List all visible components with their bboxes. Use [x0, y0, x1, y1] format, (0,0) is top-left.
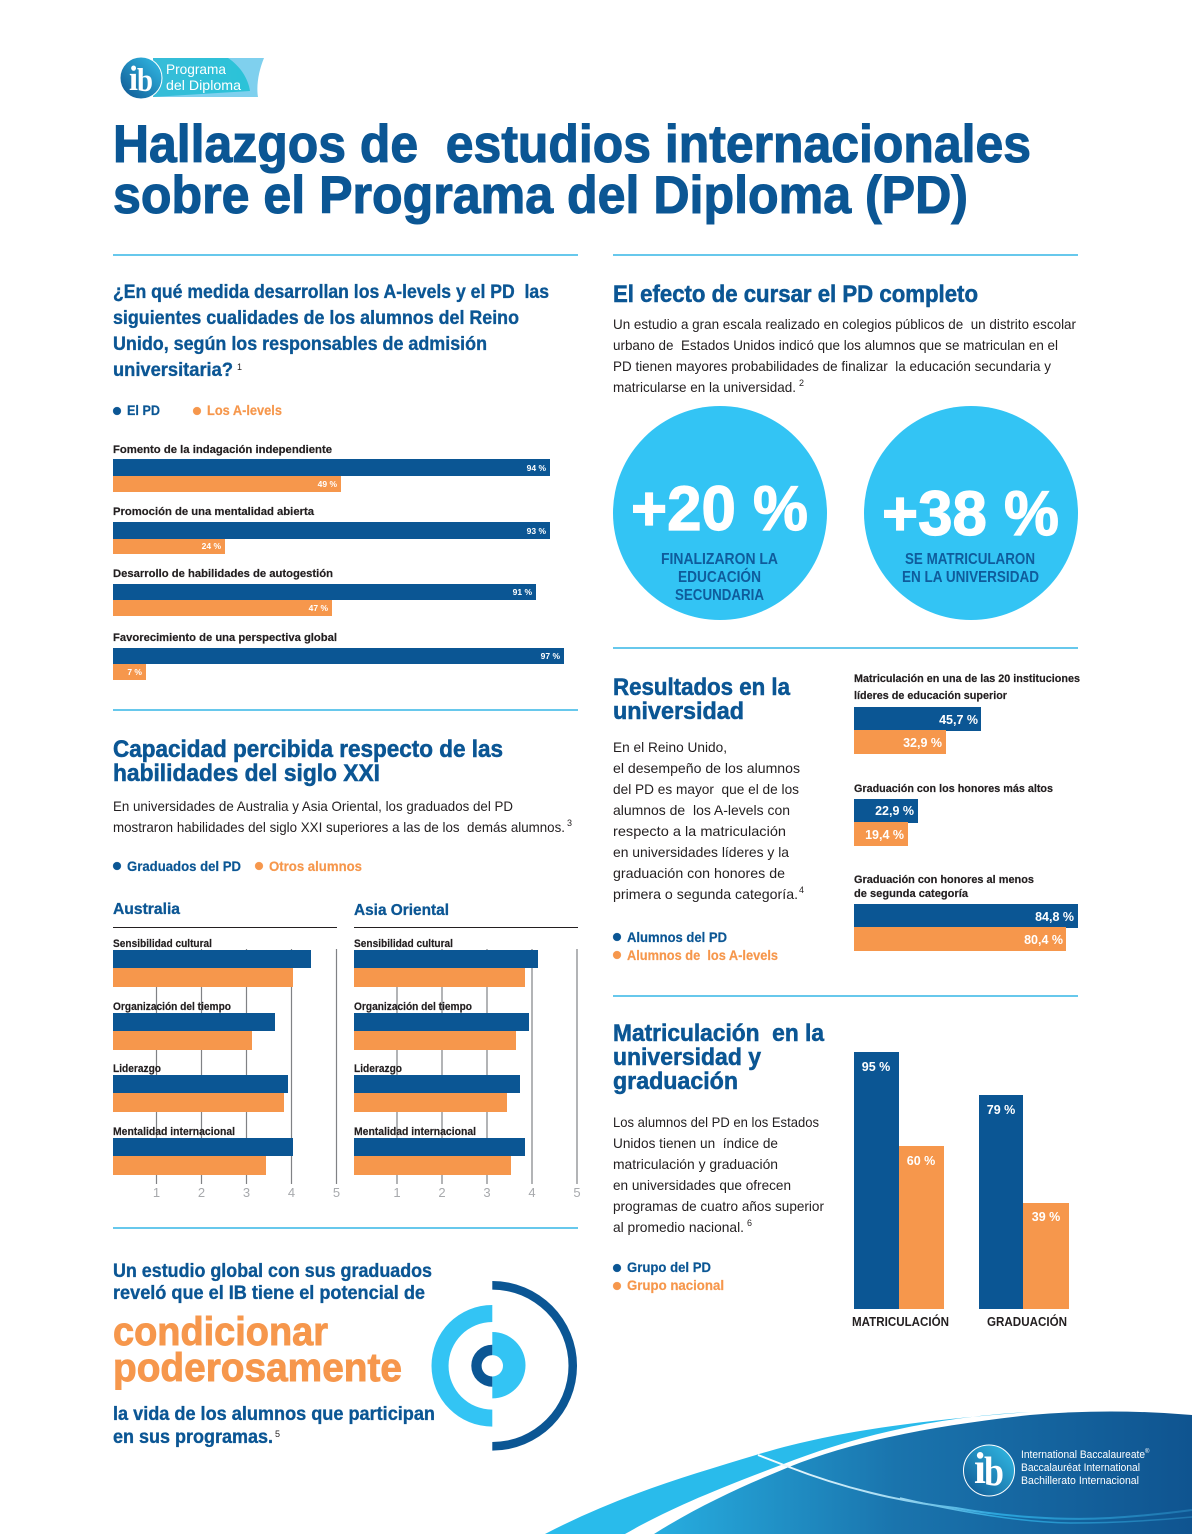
bar chart: highest honours	[854, 783, 1053, 846]
bar chart: Australia: Mentalidad internacional	[113, 1126, 235, 1138]
legend: PD and A-levels: El PD	[127, 402, 160, 418]
bar chart: Asia Oriental	[354, 902, 581, 1200]
text block: US enrolment: Unidos tienen un índice de	[613, 1135, 778, 1151]
icon: concentric half rings	[431, 1281, 577, 1451]
text block: US enrolment: 6	[747, 1218, 752, 1228]
stat circle: +20 %	[613, 406, 827, 620]
bar chart: highest honours: Graduación con los honores más altos	[854, 783, 1053, 795]
column chart: enrolment and graduation: 95 %	[862, 1060, 890, 1074]
text block: global study outro: en sus programas.	[113, 1427, 273, 1448]
text block: skills study: 3	[567, 818, 572, 828]
column chart: enrolment and graduation: MATRICULACIÓN	[852, 1314, 949, 1329]
text block: skills study: En universidades de Australia y Asia Oriental, los graduados del PD	[113, 798, 513, 814]
text block: global study intro: reveló que el IB tiene el potencial de	[113, 1283, 425, 1304]
text block: UK results: En el Reino Unido,	[613, 739, 727, 755]
bar chart: top institutions: 45,7 %	[939, 713, 978, 727]
bar chart: Australia: 1	[153, 1185, 160, 1200]
text block: UK results: graduación con honores de	[613, 865, 785, 881]
bar chart: four qualities: 94 %	[527, 463, 546, 473]
stat circle: +20 %: +20 %	[631, 474, 808, 544]
heading: enrolment: graduación	[613, 1068, 738, 1095]
bar chart: top institutions: líderes de educación superior	[854, 690, 1008, 702]
bar chart: Asia Oriental: Liderazgo	[354, 1063, 402, 1075]
footer wave	[545, 1412, 1192, 1534]
bar chart: four qualities: Fomento de la indagación independiente	[113, 444, 332, 456]
heading: enrolment: Matriculación en la	[613, 1020, 825, 1047]
heading: results: Resultados en la	[613, 674, 791, 701]
text block: global study intro	[113, 1261, 432, 1304]
bar chart: four qualities: 24 %	[202, 541, 221, 551]
bar chart: second category honours: Graduación con honores al menos	[854, 874, 1034, 886]
logo: International Baccalaureate: Bachillerato Internacional	[1021, 1475, 1139, 1487]
panel: A-levels vs PD qualities	[113, 282, 564, 680]
text block: UK results: primera o segunda categoría.	[613, 886, 798, 902]
callout: condicionar poderosamente: poderosamente	[113, 1346, 402, 1390]
stat circle: +20 %: EDUCACIÓN	[678, 568, 761, 586]
legend: graduates: Otros alumnos	[269, 858, 362, 874]
text block: UK results: respecto a la matriculación	[613, 823, 786, 839]
text block: US enrolment: al promedio nacional.	[613, 1219, 744, 1235]
bar chart: top institutions: Matriculación en una de las 20 instituciones	[854, 673, 1080, 685]
logo: International Baccalaureate: International Baccalaureate	[1021, 1449, 1145, 1461]
text block: UK results	[613, 739, 804, 902]
bar chart: Asia Oriental: 5	[573, 1185, 581, 1200]
stat circle: +38 %: +38 %	[882, 479, 1059, 549]
bar chart: Australia	[113, 901, 340, 1200]
panel: full PD effect	[613, 281, 1078, 620]
bar chart: Australia: 2	[198, 1185, 205, 1200]
stat circle: +38 %: EN LA UNIVERSIDAD	[902, 569, 1039, 586]
text block: UK results: 4	[799, 885, 804, 895]
bar chart: top institutions: 32,9 %	[903, 736, 942, 750]
bar chart: four qualities: 7 %	[127, 667, 142, 677]
bar chart: second category honours	[854, 874, 1078, 951]
callout: condicionar poderosamente	[113, 1310, 402, 1390]
bar chart: Australia: 4	[288, 1185, 295, 1200]
legend: graduates: Graduados del PD	[127, 858, 241, 874]
legend: PD and national group	[613, 1259, 724, 1293]
legend: PD and A-levels	[113, 402, 282, 418]
bar chart: Asia Oriental: Asia Oriental	[354, 902, 449, 919]
legend: PD and A-levels students: Alumnos de los A-levels	[627, 947, 778, 963]
stat circle: +20 %: FINALIZARON LA	[661, 551, 778, 568]
text block: global study outro	[113, 1404, 435, 1448]
panel: 21st century skills	[113, 736, 581, 1200]
legend: PD and national group: Grupo nacional	[627, 1277, 724, 1293]
stat circle: +20 %: SECUNDARIA	[675, 587, 764, 604]
heading: admissions question: universitaria?	[113, 360, 233, 381]
text block: US enrolment: programas de cuatro años superior	[613, 1198, 824, 1214]
column chart: enrolment and graduation: 60 %	[907, 1154, 935, 1168]
panel: global graduate study	[113, 1261, 577, 1451]
bar chart: four qualities: Promoción de una mentalidad abierta	[113, 506, 315, 518]
logo: International Baccalaureate	[964, 1444, 1150, 1496]
text block: US enrolment: Los alumnos del PD en los Estados	[613, 1114, 819, 1130]
panel: university results	[613, 673, 1080, 963]
heading: perceived capacity	[113, 736, 503, 787]
bar chart: four qualities: Desarrollo de habilidades de autogestión	[113, 568, 333, 580]
text block: skills study: mostraron habilidades del siglo XXI superiores a las de los demás alumnos.	[113, 819, 565, 835]
bar chart: second category honours: de segunda categoría	[854, 888, 969, 900]
stat circle: +38 %: SE MATRICULARON	[905, 551, 1035, 568]
bar chart: Australia: Liderazgo	[113, 1063, 161, 1075]
heading: admissions question: Unido, según los responsables de admisión	[113, 334, 487, 355]
column chart: enrolment and graduation	[852, 1052, 1069, 1329]
bar chart: second category honours: 80,4 %	[1024, 933, 1063, 947]
text block: US enrolment: en universidades que ofrecen	[613, 1177, 791, 1193]
bar chart: four qualities: 97 %	[541, 651, 560, 661]
bar chart: four qualities: 49 %	[318, 479, 337, 489]
heading: enrolment	[613, 1020, 825, 1095]
heading: admissions question: ¿En qué medida desarrollan los A-levels y el PD las	[113, 282, 549, 303]
bar chart: Australia: 3	[243, 1185, 250, 1200]
legend: PD and national group: Grupo del PD	[627, 1259, 711, 1275]
logo: Programa del Diploma: del Diploma	[166, 77, 241, 93]
text block: US enrolment	[613, 1114, 824, 1235]
bar chart: Australia: Sensibilidad cultural	[113, 938, 212, 950]
column chart: enrolment and graduation: 39 %	[1032, 1210, 1060, 1224]
logo: International Baccalaureate: b	[984, 1448, 1004, 1494]
bar chart: highest honours: 22,9 %	[875, 804, 914, 818]
text block: global study intro: Un estudio global con sus graduados	[113, 1261, 432, 1282]
title	[113, 115, 1031, 225]
logo: Programa del Diploma: Programa	[166, 61, 226, 77]
legend: PD and A-levels students	[613, 929, 778, 963]
logo: Programa del Diploma	[120, 57, 264, 99]
text block: UK results: alumnos de los A-levels con	[613, 802, 790, 818]
text block: UK results: del PD es mayor que el de los	[613, 781, 799, 797]
bar chart: four qualities: 93 %	[527, 526, 546, 536]
bar chart: Asia Oriental: 1	[393, 1185, 401, 1200]
heading: perceived capacity: Capacidad percibida respecto de las	[113, 736, 503, 763]
panel: enrolment and graduation	[613, 1020, 1069, 1329]
bar chart: Asia Oriental: 3	[483, 1185, 491, 1200]
logo: International Baccalaureate: Baccalauréat International	[1021, 1462, 1140, 1474]
bar chart: four qualities: 91 %	[513, 587, 532, 597]
bar chart: Australia: Australia	[113, 901, 180, 918]
callout: condicionar poderosamente: condicionar	[113, 1310, 328, 1354]
text block: skills study	[113, 798, 572, 835]
heading: effect of full PD: El efecto de cursar el PD completo	[613, 281, 978, 308]
bar chart: four qualities: 47 %	[309, 603, 328, 613]
heading: enrolment: universidad y	[613, 1044, 762, 1071]
text block: effect study	[613, 316, 1076, 395]
text block: effect study: urbano de Estados Unidos indicó que los alumnos que se matriculan en el	[613, 337, 1058, 353]
heading: admissions question: siguientes cualidades de los alumnos del Reino	[113, 308, 519, 329]
logo: International Baccalaureate: ®	[1145, 1448, 1150, 1455]
bar chart: Australia: Organización del tiempo	[113, 1001, 231, 1013]
bar chart: Asia Oriental: Mentalidad internacional	[354, 1126, 476, 1138]
bar chart: top institutions	[854, 673, 1080, 754]
text block: US enrolment: matriculación y graduación	[613, 1156, 778, 1172]
stat circle: +38 %	[864, 406, 1078, 620]
bar chart: highest honours: 19,4 %	[865, 828, 904, 842]
text block: effect study: matricularse en la universidad.	[613, 379, 796, 395]
heading: admissions question	[113, 282, 549, 381]
bar chart: Asia Oriental: Organización del tiempo	[354, 1001, 472, 1013]
text block: UK results: en universidades líderes y la	[613, 844, 789, 860]
bar chart: Australia: 5	[333, 1185, 340, 1200]
bar chart: second category honours: 84,8 %	[1035, 910, 1074, 924]
title: sobre el Programa del Diploma (PD)	[113, 166, 968, 225]
text block: effect study: 2	[799, 378, 804, 388]
bar chart: Asia Oriental: Sensibilidad cultural	[354, 938, 453, 950]
text block: effect study: Un estudio a gran escala realizado en colegios públicos de un distrito escolar	[613, 316, 1076, 332]
logo: International Baccalaureate: i	[974, 1444, 986, 1493]
heading: results: universidad	[613, 698, 744, 725]
text block: global study outro: 5	[275, 1429, 280, 1439]
heading: results	[613, 674, 791, 725]
title: Hallazgos de estudios internacionales	[113, 115, 1031, 174]
logo: Programa del Diploma: i	[129, 59, 138, 98]
heading: admissions question: 1	[237, 362, 242, 372]
logo: Programa del Diploma: b	[137, 63, 153, 99]
bar chart: Asia Oriental: 2	[438, 1185, 446, 1200]
column chart: enrolment and graduation: 79 %	[987, 1103, 1015, 1117]
text block: global study outro: la vida de los alumnos que participan	[113, 1404, 435, 1425]
legend: graduates	[113, 858, 362, 874]
bar chart: four qualities	[113, 444, 564, 680]
text block: UK results: el desempeño de los alumnos	[613, 760, 800, 776]
legend: PD and A-levels: Los A-levels	[207, 402, 282, 418]
text block: effect study: PD tienen mayores probabilidades de finalizar la educación secundaria y	[613, 358, 1051, 374]
bar chart: four qualities: Favorecimiento de una perspectiva global	[113, 632, 337, 644]
column chart: enrolment and graduation: GRADUACIÓN	[987, 1314, 1067, 1329]
heading: perceived capacity: habilidades del siglo XXI	[113, 760, 380, 787]
bar chart: Asia Oriental: 4	[528, 1185, 536, 1200]
legend: PD and A-levels students: Alumnos del PD	[627, 929, 727, 945]
